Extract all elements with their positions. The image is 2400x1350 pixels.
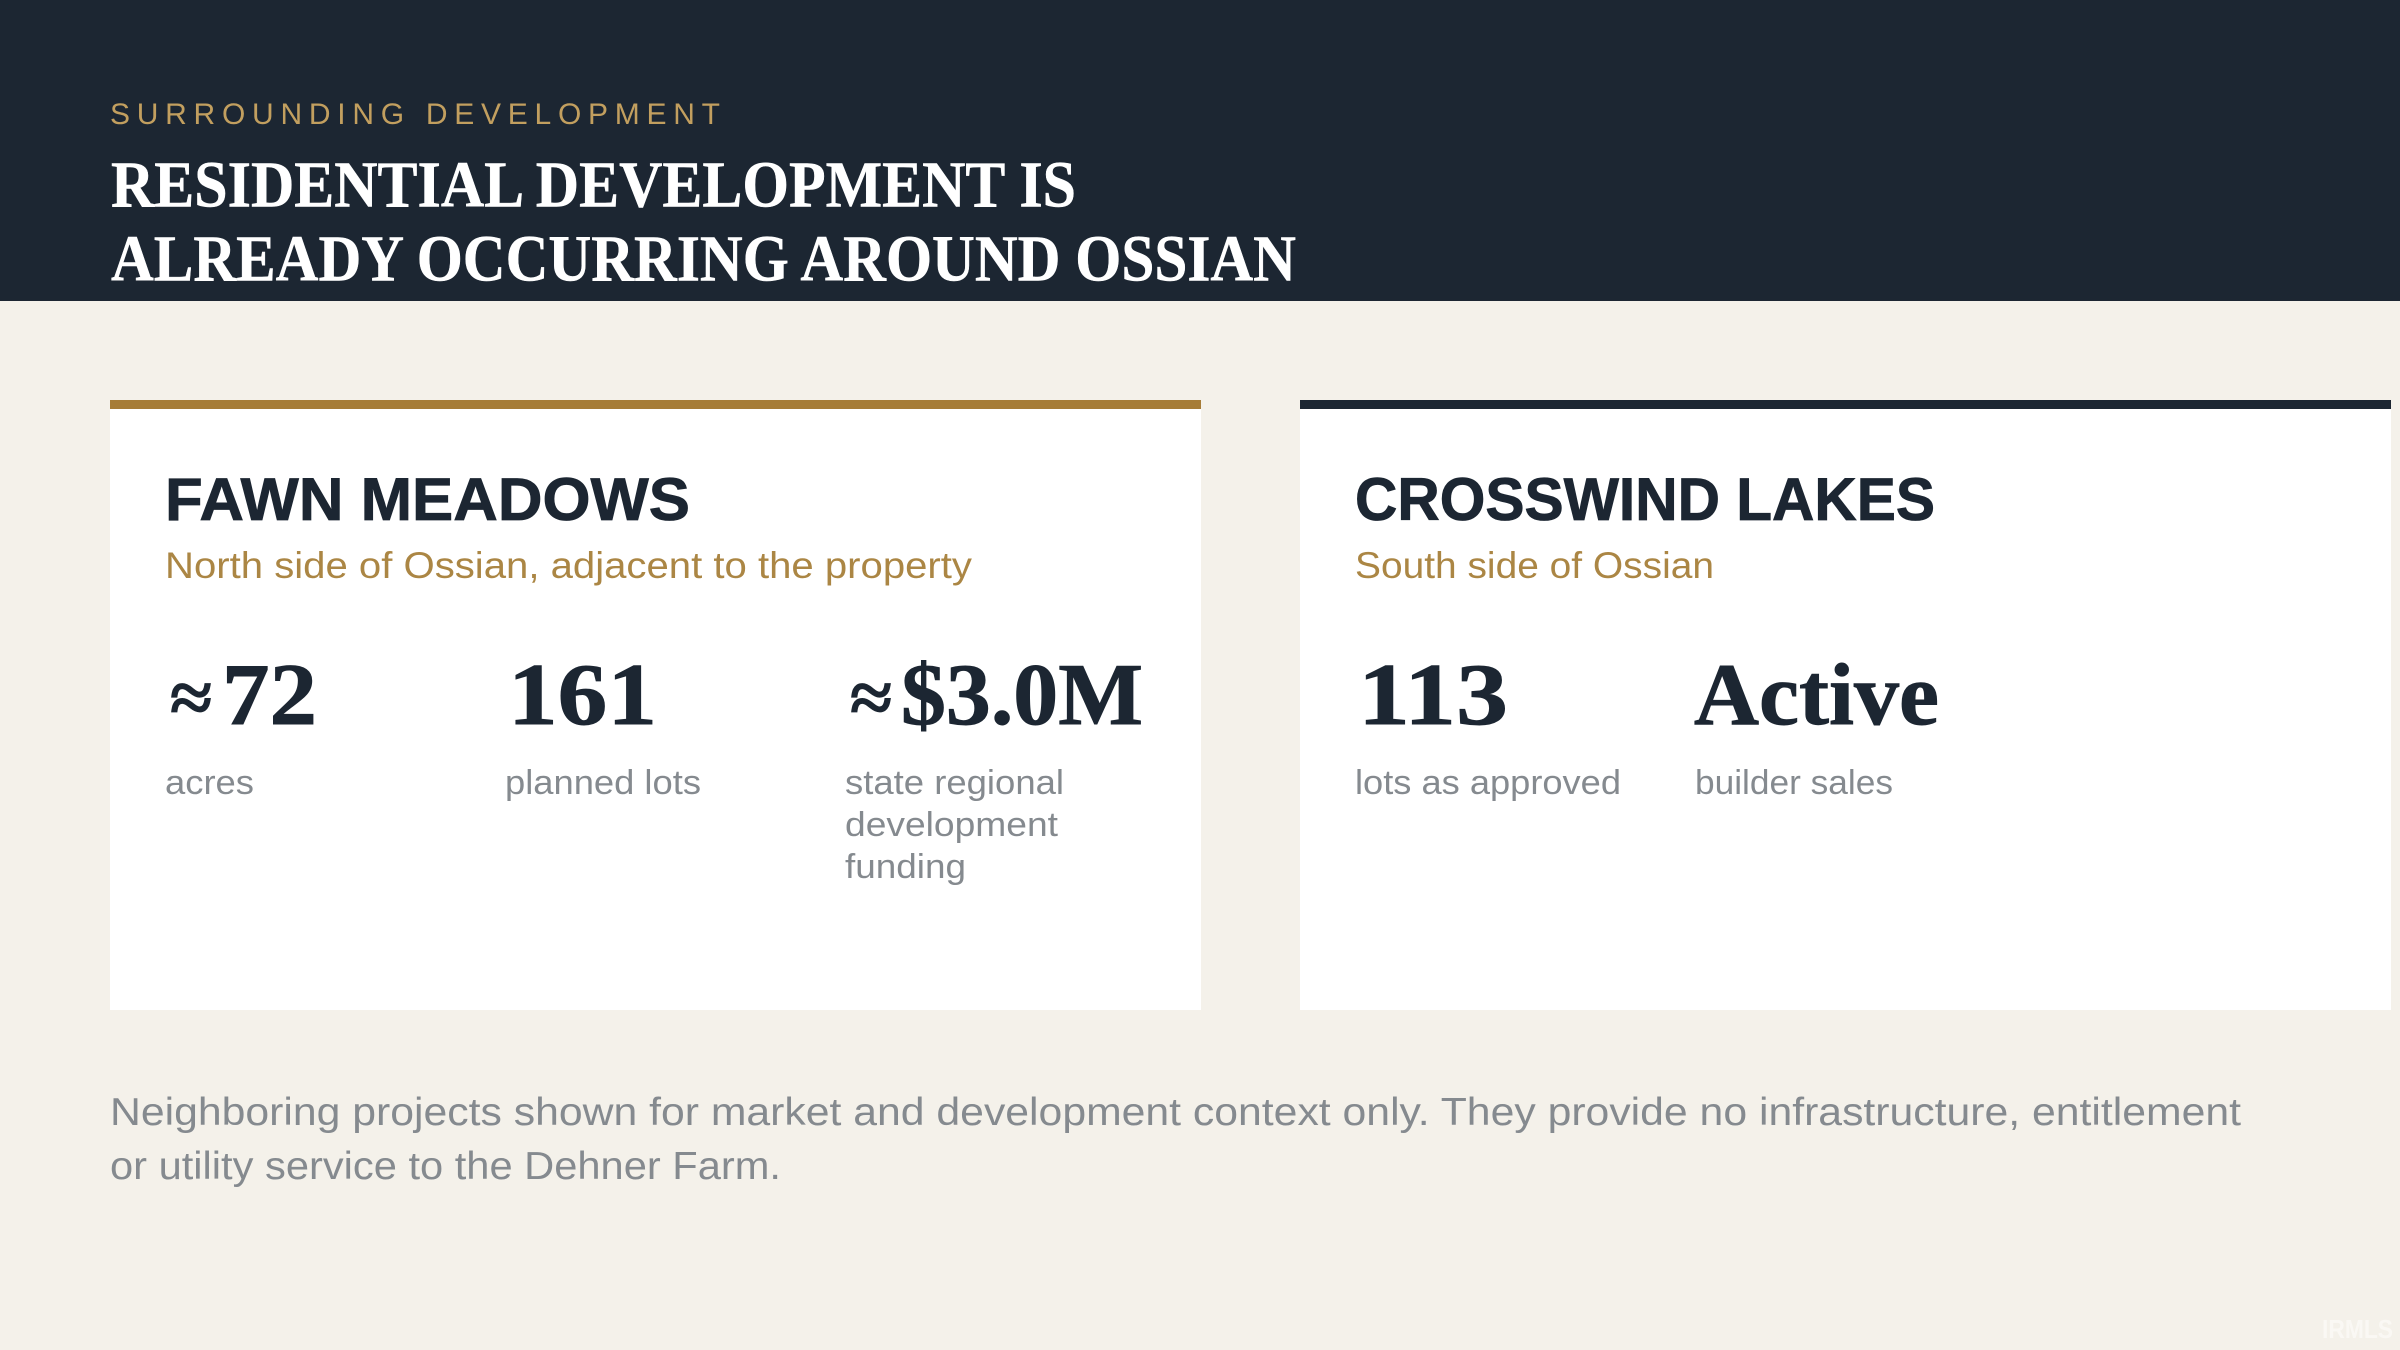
stat: builder sales	[1694, 647, 1939, 802]
heading: Crosswind Lakes: CROSSWIND LAKES	[1355, 466, 1935, 533]
stat: lots as approved	[1355, 647, 1621, 802]
stat: lots as approved: lots as approved	[1355, 764, 1621, 802]
stat: planned lots	[505, 647, 701, 802]
subtitle: Crosswind Lakes location: South side of Ossian	[1355, 545, 1714, 586]
heading: Fawn Meadows: FAWN MEADOWS	[165, 466, 690, 533]
stat: acres: 72	[222, 647, 317, 744]
stat: funding: ≈	[850, 658, 892, 738]
footnote: or utility service to the Dehner Farm.	[110, 1145, 781, 1188]
title	[111, 148, 1296, 296]
stat: funding: development	[845, 806, 1059, 844]
panel: Crosswind Lakes	[1300, 400, 2391, 1010]
stat: lots as approved: 113	[1358, 647, 1508, 744]
stat: acres: ≈	[170, 658, 212, 738]
stat: acres	[165, 647, 317, 802]
footnote: Neighboring projects shown for market and development context only. They provide no infrastructure, entitlement	[110, 1091, 2241, 1134]
footnote	[110, 1091, 2241, 1188]
stat: funding	[845, 647, 1143, 886]
stat: funding: funding	[845, 848, 966, 886]
title: ALREADY OCCURRING AROUND OSSIAN	[111, 222, 1296, 296]
panel: Fawn Meadows	[110, 400, 1201, 1010]
stat: planned lots: 161	[508, 647, 657, 744]
header band	[0, 0, 2400, 301]
eyebrow: SURROUNDING DEVELOPMENT	[110, 98, 720, 131]
stat: acres: acres	[165, 764, 254, 802]
stat: funding: state regional	[845, 764, 1064, 802]
title: RESIDENTIAL DEVELOPMENT IS	[111, 148, 1076, 222]
stat: planned lots: planned lots	[505, 764, 701, 802]
subtitle: Fawn Meadows location: North side of Ossian, adjacent to the property	[165, 545, 973, 586]
stat: builder sales: Active	[1694, 647, 1939, 744]
stat: funding: $3.0M	[901, 647, 1143, 744]
stat: builder sales: builder sales	[1695, 764, 1893, 802]
